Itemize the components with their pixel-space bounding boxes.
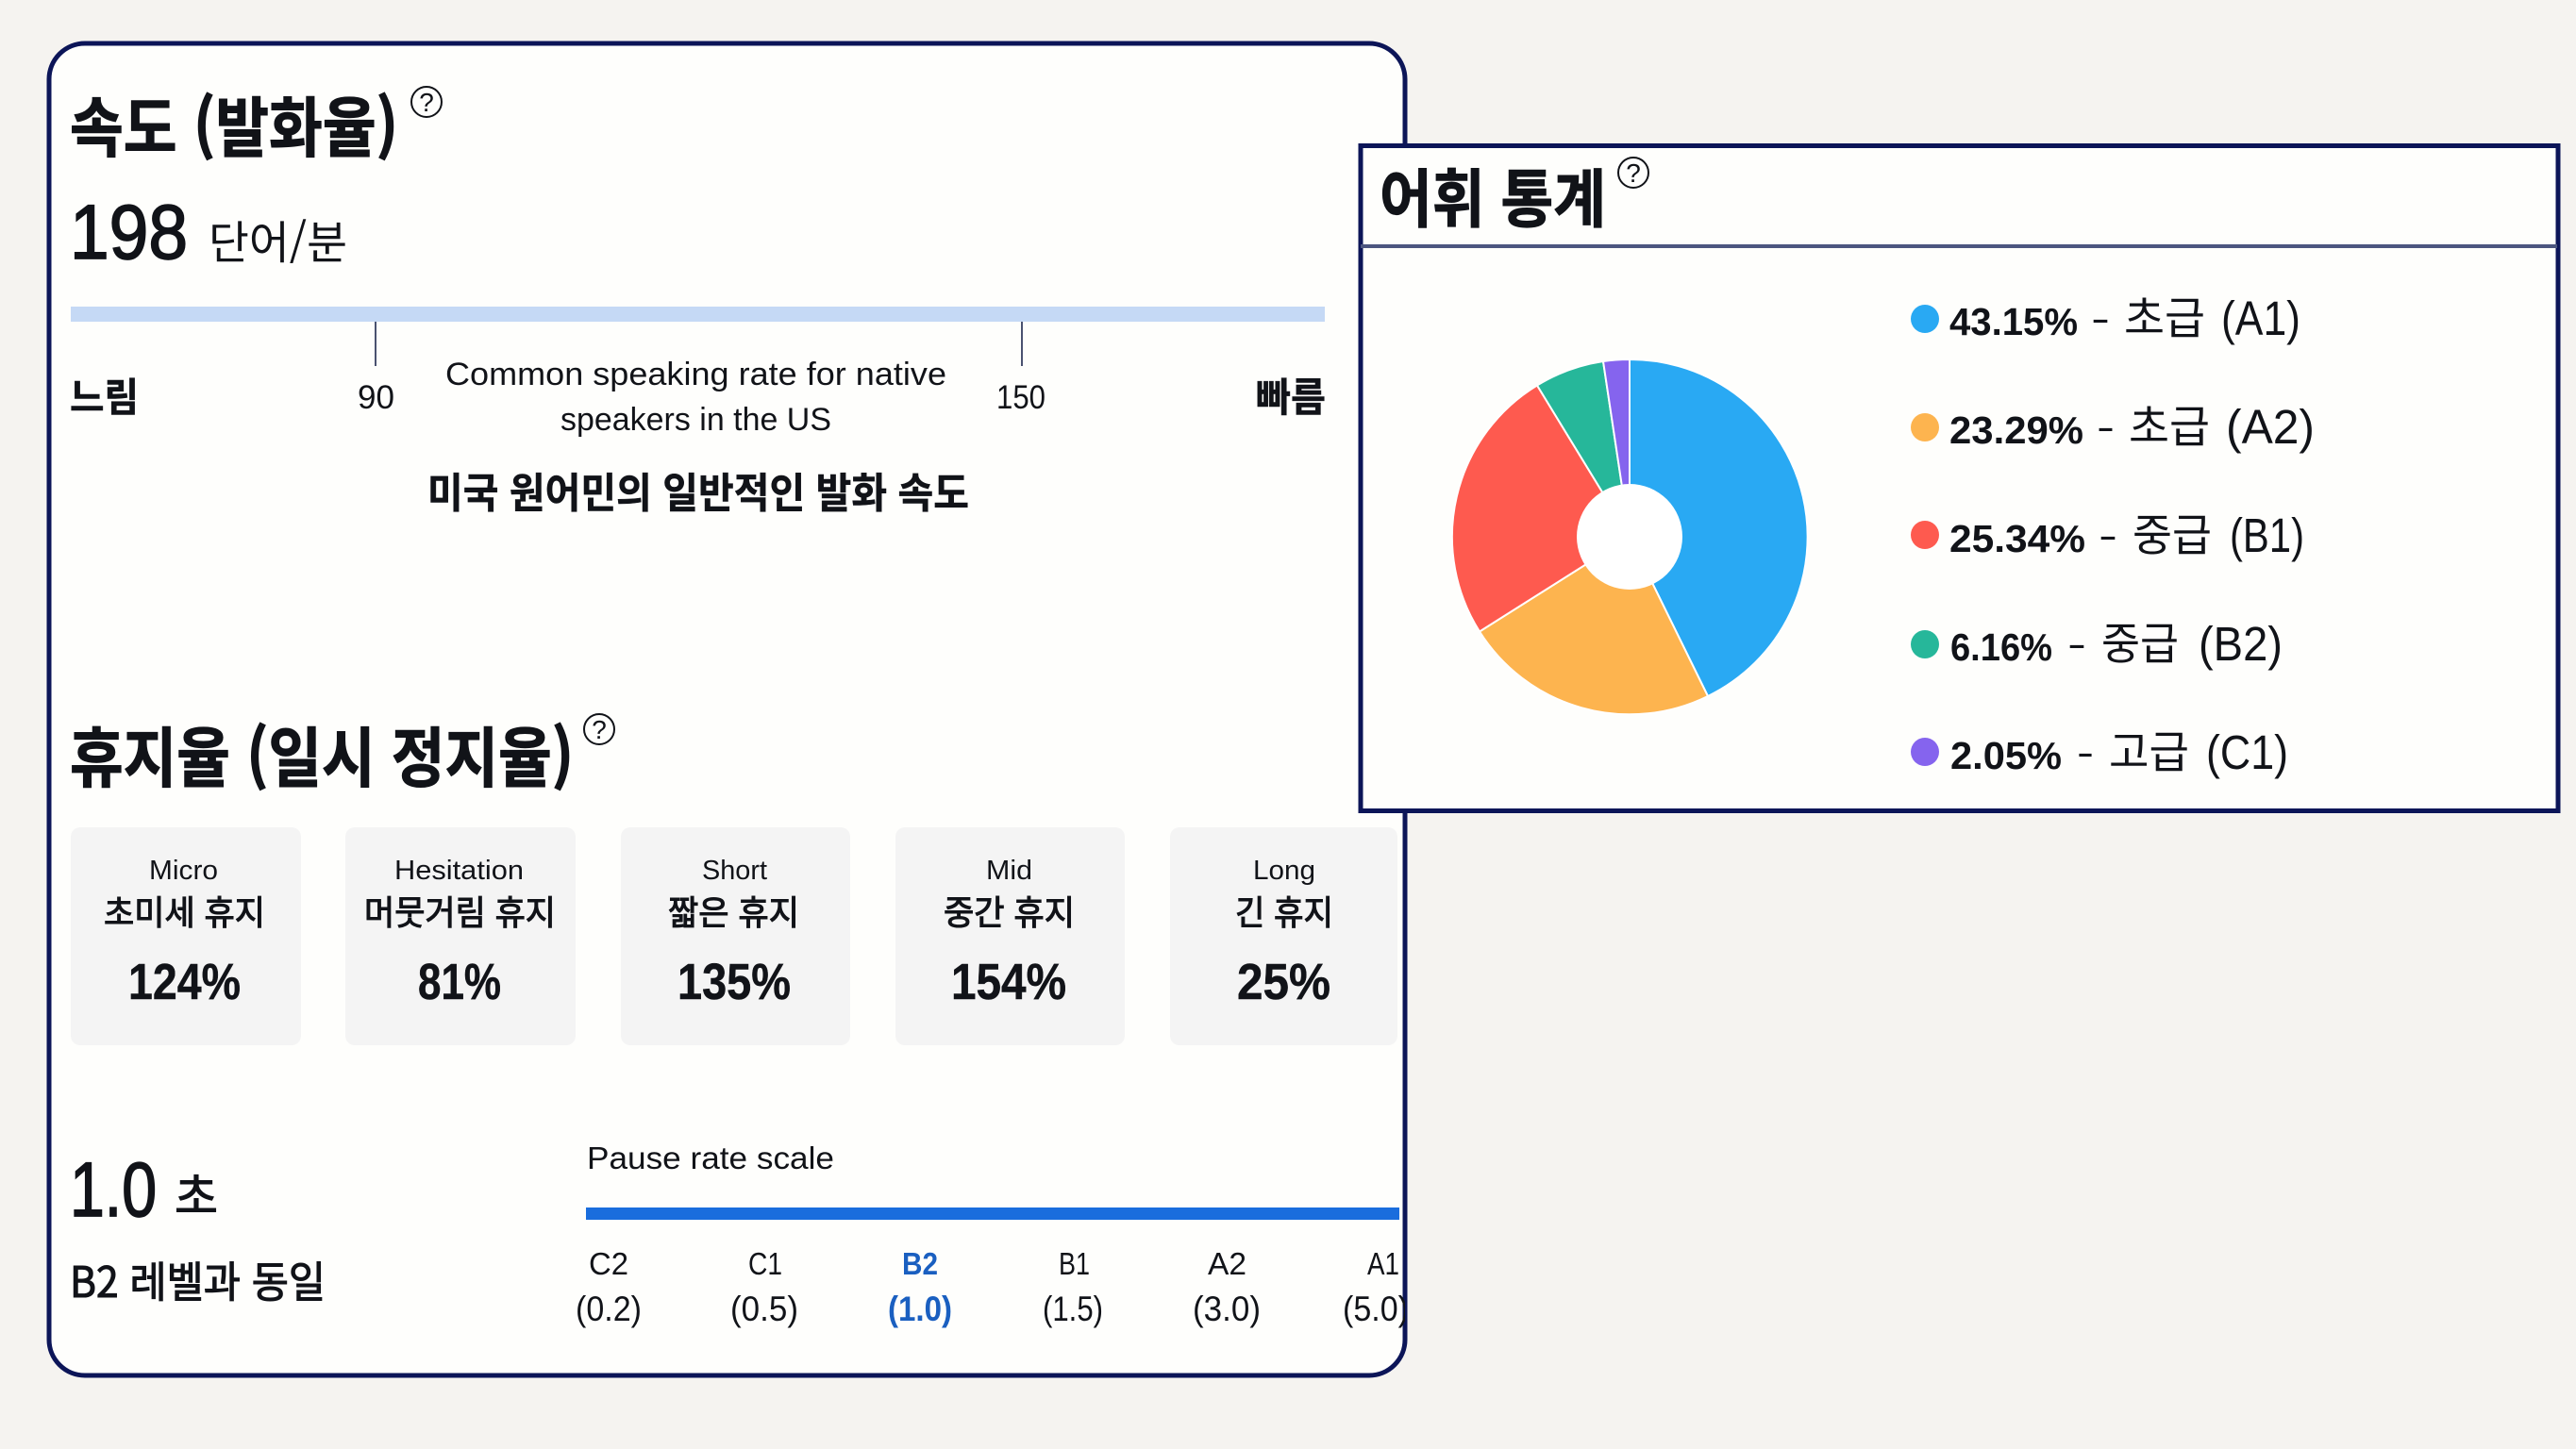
legend: B2 [1911, 608, 2283, 673]
pause scale labels: (3.0) [1193, 1290, 1261, 1328]
pause scale labels: B1 [1059, 1246, 1090, 1281]
legend: B1 [1911, 499, 2304, 564]
heading: vocabulary statistics: 어휘 통계 [1380, 149, 1606, 241]
pause card: hesitation: 81% [418, 954, 501, 1010]
legend: A1: - [2091, 298, 2110, 340]
pause card: mid: 154% [951, 954, 1066, 1010]
pause duration value: 초 [175, 1159, 218, 1227]
label: 150: 150 [996, 379, 1045, 416]
label: fast: 빠름 [1256, 366, 1326, 424]
tick: 90 [375, 322, 376, 366]
pause card: hesitation: 머뭇거림 휴지 [364, 886, 556, 935]
legend: A2 [1911, 391, 2315, 456]
legend: B1: (B1) [2230, 508, 2304, 562]
native rate note: speakers in the US [560, 402, 831, 438]
legend: B2: 6.16% [1950, 625, 2052, 669]
pause duration value: 1.0 [70, 1147, 157, 1233]
legend: B1: - [2099, 515, 2117, 557]
icon: speed help: ? [419, 88, 434, 117]
pause scale labels: A1 [1367, 1246, 1399, 1281]
legend: A1: (A1) [2221, 291, 2300, 345]
legend: B2: (B2) [2199, 617, 2283, 671]
pause scale labels: C1 [748, 1246, 782, 1281]
legend: B1: 중급 [2133, 499, 2212, 564]
heading: speed: 속도 (발화율) [70, 75, 398, 170]
icon: pause help: ? [592, 715, 607, 744]
label: slow: 느림 [70, 366, 139, 424]
legend: C1: 고급 [2109, 716, 2189, 781]
legend: B2: - [2067, 624, 2086, 665]
legend: C1: 2.05% [1950, 734, 2062, 777]
native rate note in Korean: 미국 원어민의 일반적인 발화 속도 [427, 459, 969, 520]
legend: A2: (A2) [2226, 400, 2315, 454]
legend: A2: 23.29% [1949, 408, 2083, 452]
panel: vocabulary statistics [1361, 145, 2558, 811]
pause card: short: 135% [677, 954, 791, 1010]
pause card: hesitation [345, 827, 576, 1045]
pause card: mid [895, 827, 1125, 1045]
speed scale bar [71, 307, 1325, 322]
pause card: mid: Mid [986, 856, 1032, 886]
donut chart [1452, 359, 1808, 714]
pause card: long: Long [1253, 856, 1315, 886]
pause scale bar [586, 1208, 1399, 1220]
icon: speed help [411, 87, 442, 117]
speed unit: 단어/분 [209, 206, 347, 272]
pause scale labels [576, 1246, 1409, 1328]
pause scale labels: (0.5) [730, 1290, 798, 1328]
pause card: hesitation: Hesitation [394, 856, 524, 886]
speed value: 198 [70, 190, 188, 275]
pause card: long: 25% [1237, 954, 1330, 1010]
pause scale labels: C2 [589, 1246, 628, 1281]
tick: 150 [1021, 322, 1023, 366]
pause card: mid: 중간 휴지 [944, 886, 1075, 935]
heading: pause rate: 휴지율 (일시 정지율) [70, 706, 574, 800]
legend: A1 [1911, 282, 2300, 347]
pause card: micro [71, 827, 301, 1045]
native rate note [445, 357, 946, 438]
pause card: micro: 초미세 휴지 [104, 886, 265, 935]
pause card: short: Short [702, 856, 767, 886]
legend: A1: 43.15% [1949, 300, 2078, 343]
pause card: micro: Micro [149, 856, 218, 886]
pause card: short: 짧은 휴지 [668, 886, 799, 935]
legend: A2: 초급 [2129, 391, 2210, 456]
pause card: short [621, 827, 850, 1045]
icon: vocabulary help [1618, 158, 1648, 188]
icon: pause help [584, 714, 614, 744]
label: 90: 90 [358, 379, 394, 416]
pause scale labels: (1.5) [1043, 1290, 1103, 1328]
header divider [1361, 244, 2557, 248]
pause scale labels: B2 [902, 1246, 938, 1281]
legend: C1: - [2077, 732, 2094, 774]
legend: B2: 중급 [2101, 608, 2179, 673]
pause card: long: 긴 휴지 [1235, 886, 1333, 935]
panel: speed and pause card [49, 43, 1409, 1375]
legend: B1: 25.34% [1949, 517, 2085, 560]
native rate note: Common speaking rate for native [445, 357, 946, 392]
legend: C1 [1911, 716, 2288, 781]
label: pause rate scale: Pause rate scale [587, 1141, 834, 1175]
pause scale labels: (5.0) [1343, 1290, 1409, 1328]
legend: A1: 초급 [2124, 282, 2205, 347]
legend: A2: - [2097, 407, 2115, 448]
pause scale labels: (0.2) [576, 1290, 642, 1328]
pause scale labels: A2 [1208, 1246, 1246, 1281]
pause card: micro: 124% [128, 954, 241, 1010]
level note: B2 레벨과 동일 [70, 1248, 326, 1309]
pause card: long [1170, 827, 1397, 1045]
icon: vocabulary help: ? [1626, 158, 1641, 188]
pause scale labels: (1.0) [888, 1290, 952, 1328]
legend: C1: (C1) [2206, 725, 2288, 779]
